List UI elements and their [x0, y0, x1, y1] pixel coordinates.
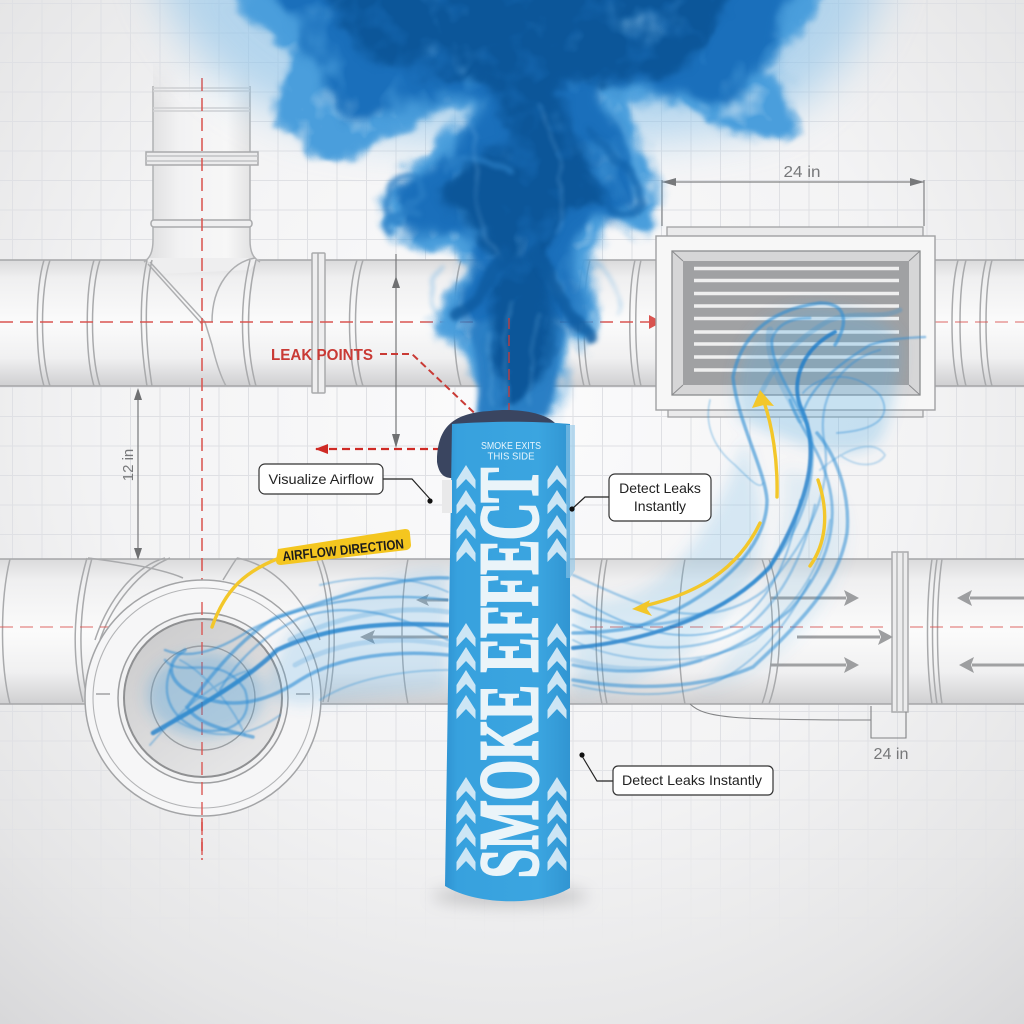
callout: Visualize Airflow: [259, 464, 433, 504]
callout: Detect Leaks Instantly upper: [569, 474, 711, 521]
canister shadow: [432, 887, 588, 905]
dimension: 12 in left: [120, 388, 142, 560]
canister title: SMOKE EFFECT: [463, 468, 556, 878]
centre line arrowhead: [649, 315, 662, 329]
dimension: 24 in lower: [690, 704, 908, 763]
dimension: 12 in left: 12 in: [120, 449, 137, 481]
yellow airflow arrows: [212, 390, 825, 627]
grey flow arrows: [360, 590, 1024, 673]
callout: Visualize Airflow: Visualize Airflow: [268, 471, 374, 487]
smoke column base: [470, 315, 566, 416]
smoke canister: [437, 410, 575, 901]
canister notice text: SMOKE EXITS: [481, 441, 541, 452]
upper horizontal duct with tee: [0, 50, 1024, 393]
canister chevrons: [456, 465, 566, 871]
lower horizontal duct: [0, 552, 1024, 712]
leak points label: LEAK POINTS: [271, 347, 373, 364]
round duct opening: [85, 580, 321, 860]
callout: Detect Leaks Instantly lower: Detect Leaks Instantly: [622, 772, 762, 788]
callout: Detect Leaks Instantly upper: Detect Leaks: [619, 480, 701, 496]
airflow direction tag: AIRFLOW DIRECTION: [282, 536, 405, 564]
wall vent grille: [656, 227, 935, 417]
dimension: upper duct height: [392, 254, 400, 448]
callout: Detect Leaks Instantly lower: [579, 752, 773, 795]
red centre dash over smoke: [508, 318, 510, 420]
smoke wisps lower duct and vent: [147, 303, 925, 745]
dimension: 24 in top: [662, 164, 924, 226]
soft haze: [147, 305, 900, 737]
smoke canister: THIS SIDE: [488, 452, 535, 462]
dimension: 24 in lower: 24 in: [874, 746, 908, 763]
vertical riser: [144, 50, 262, 386]
centre lines: [0, 78, 1024, 860]
leak points label: [271, 347, 486, 454]
smoke curl detail: [388, 100, 648, 405]
callout: Detect Leaks Instantly upper: Instantly: [634, 498, 686, 514]
smoke cloud and column: [150, 0, 890, 416]
dimension: 24 in top: 24 in: [784, 164, 820, 181]
